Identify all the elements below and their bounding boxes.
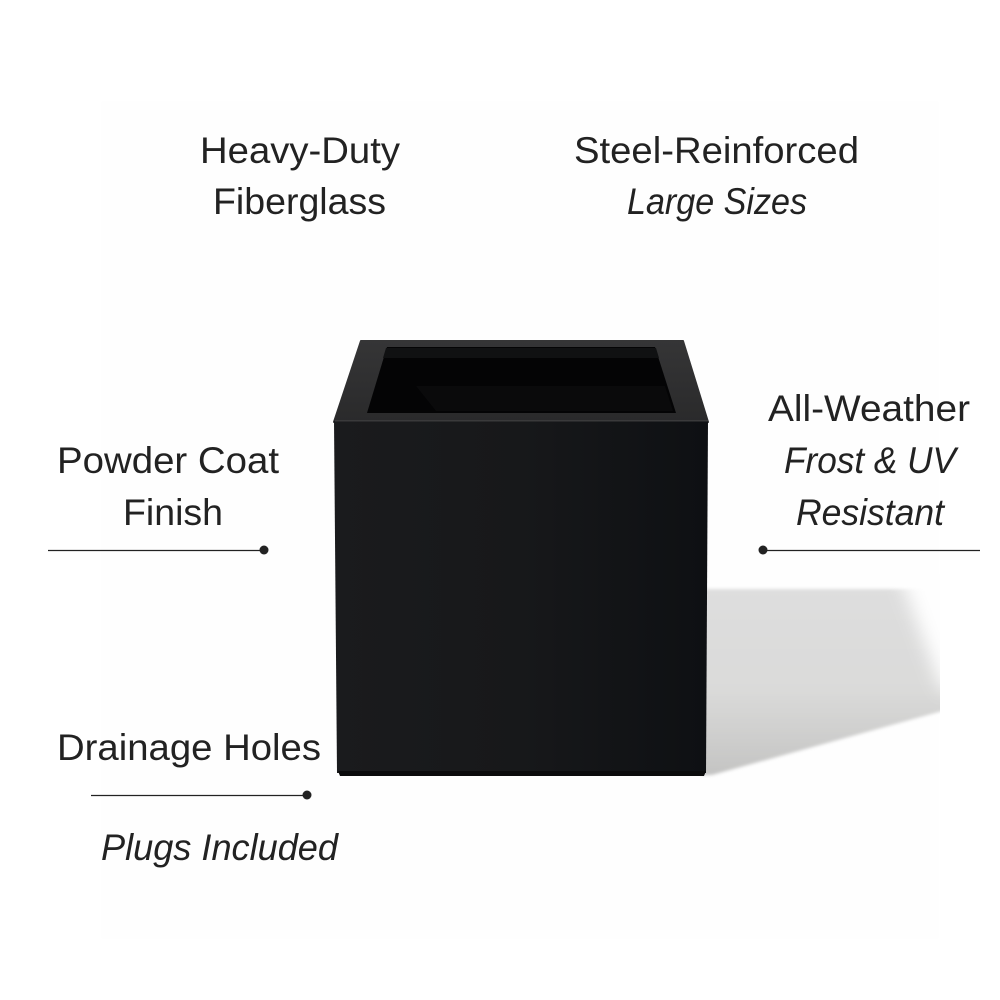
- cast shadow: [700, 588, 940, 776]
- label: powder coat finish: Powder Coat: [57, 440, 280, 481]
- label: powder coat finish: [57, 440, 280, 533]
- label: plugs included: Plugs Included: [101, 827, 339, 868]
- label: all-weather: [768, 388, 970, 533]
- label: all-weather: Frost & UV: [784, 440, 959, 481]
- label: steel-reinforced large sizes: Steel-Reinforced: [574, 130, 859, 171]
- callout line: all-weather: [758, 546, 980, 554]
- planter inner floor shadow: [416, 386, 673, 411]
- label: drainage holes: Drainage Holes: [57, 727, 321, 768]
- label: powder coat finish: Finish: [123, 492, 223, 533]
- label: all-weather: All-Weather: [768, 388, 970, 429]
- planter opening: [367, 347, 676, 413]
- label: steel-reinforced large sizes: [574, 130, 859, 222]
- callout line: drainage holes: [91, 790, 312, 800]
- label: all-weather: Resistant: [796, 492, 946, 533]
- planter rim: [334, 341, 708, 422]
- planter rim highlight: [335, 420, 708, 422]
- label: heavy-duty fiberglass: [200, 130, 401, 222]
- planter cube: [334, 341, 708, 776]
- label: steel-reinforced large sizes: Large Sizes: [627, 181, 807, 222]
- photo background: [100, 100, 940, 940]
- infographic canvas: [48, 136, 980, 868]
- planter base: [338, 771, 706, 776]
- label: heavy-duty fiberglass: Heavy-Duty: [200, 130, 401, 171]
- label: heavy-duty fiberglass: Fiberglass: [213, 181, 386, 222]
- callout line: powder coat: [48, 546, 268, 554]
- planter front face: [334, 421, 708, 773]
- planter inner wall: [383, 348, 659, 358]
